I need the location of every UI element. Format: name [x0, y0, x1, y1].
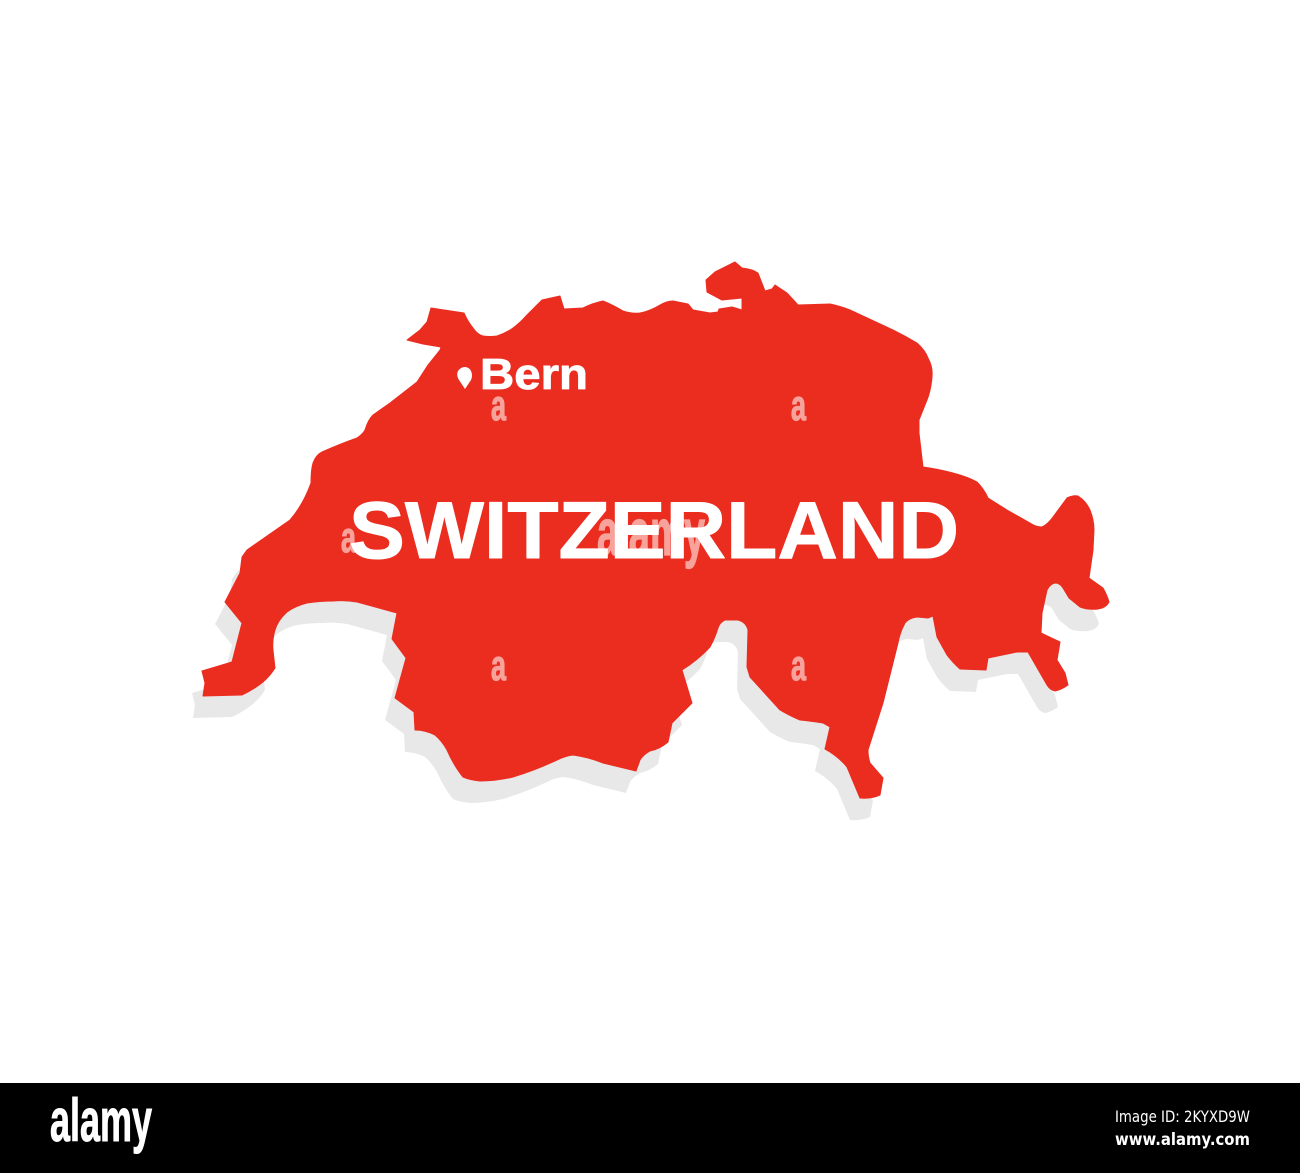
label: Bern: Bern — [480, 350, 588, 399]
footer bar — [0, 1083, 1300, 1173]
footer logo: alamy: alamy — [50, 1087, 152, 1154]
footer image id: Image ID: 2KYXD9W — [1115, 1107, 1250, 1126]
map of Switzerland — [202, 262, 1109, 798]
watermark marks: a — [341, 514, 357, 562]
watermark marks: alamy — [597, 495, 705, 569]
watermark marks: a — [791, 642, 807, 690]
icon: location pin — [457, 367, 472, 389]
watermark marks: a — [791, 382, 807, 430]
watermark marks — [341, 382, 807, 690]
infographic canvas — [0, 262, 1300, 1173]
watermark marks: a — [491, 642, 507, 690]
watermark marks: a — [491, 382, 507, 430]
footer url: www.alamy.com — [1115, 1130, 1250, 1150]
title: SWITZERLAND: SWITZERLAND — [349, 486, 959, 576]
map shadow — [192, 570, 1099, 820]
